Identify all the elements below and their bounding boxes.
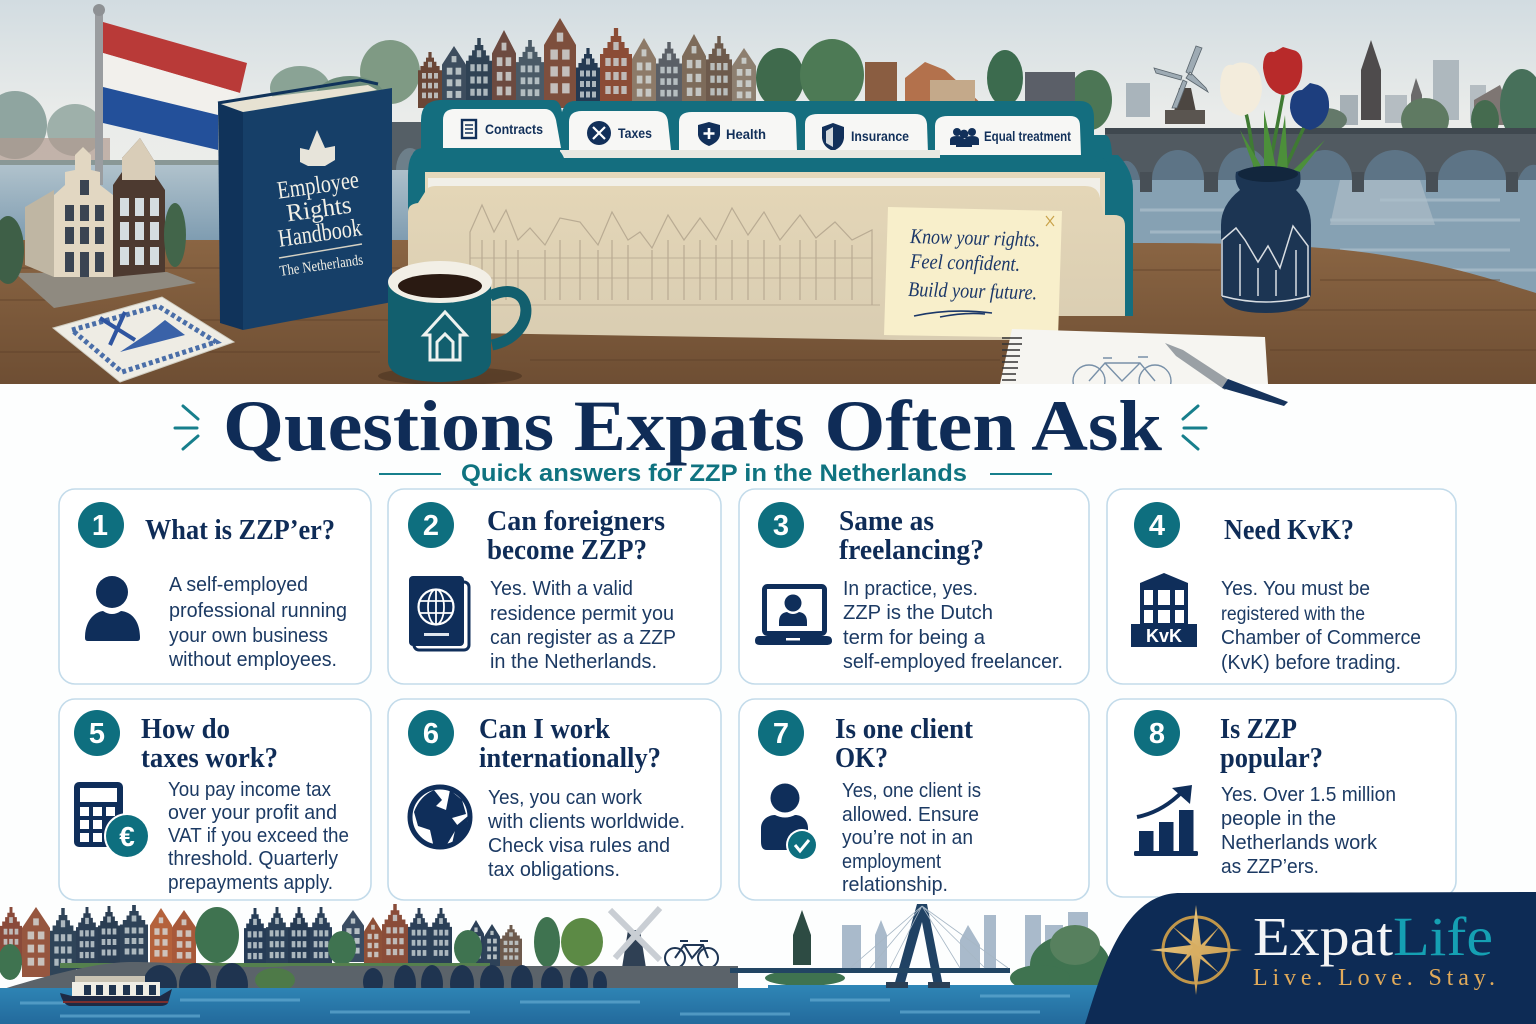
trees behind the folder <box>756 39 1112 130</box>
number badge 2 <box>408 502 454 548</box>
answer 1: professional running <box>169 599 347 622</box>
crest <box>300 130 335 166</box>
skyline towers <box>842 912 1088 975</box>
panel: question 5 <box>59 699 371 900</box>
icon: calculator with euro <box>74 782 150 859</box>
distant trees and town on the left <box>0 40 430 166</box>
answer 8: Netherlands work <box>1221 831 1378 854</box>
number badge 6 <box>408 710 454 756</box>
number badge 8 <box>1134 710 1180 756</box>
heading 8: popular? <box>1220 743 1323 774</box>
answer 6: Check visa rules and <box>488 834 670 857</box>
canal boat <box>60 976 172 1006</box>
icon: laptop with person <box>755 586 832 645</box>
panel: question 6 <box>388 699 721 900</box>
book: Employee Rights Handbook: Employee <box>275 166 360 205</box>
heading 7: OK? <box>835 743 888 774</box>
tab: Taxes: Taxes <box>618 126 652 141</box>
answer 2: can register as a ZZP <box>490 626 676 649</box>
title: Questions Expats Often Ask <box>223 386 1162 466</box>
answer 8 <box>1221 783 1396 878</box>
long stone bridge <box>0 962 738 1007</box>
heading 2: Can foreigners <box>487 506 665 537</box>
answer 5: over your profit and <box>168 801 337 824</box>
brand name: ExpatLife <box>1253 906 1493 967</box>
heading 7 <box>835 714 974 774</box>
answer 6 <box>487 786 685 881</box>
icon: KvK building <box>1131 573 1197 647</box>
tab: Taxes <box>569 111 671 150</box>
answer 4: registered with the <box>1221 604 1365 625</box>
answer 1: A self-employed <box>169 573 308 596</box>
icon: rising bar chart <box>1134 785 1198 856</box>
answer 7: relationship. <box>842 873 948 896</box>
answer 3 <box>843 577 1063 673</box>
faint sketch of houses on the folder <box>470 205 880 305</box>
tagline: Live. Love. Stay. <box>1253 965 1495 991</box>
number badge 4: 4 <box>1149 510 1165 542</box>
answer 7: employment <box>842 850 941 873</box>
windmill <box>610 908 660 968</box>
heading 3: freelancing? <box>839 535 984 566</box>
icon: compass rose <box>1150 905 1242 995</box>
number badge 1: 1 <box>92 510 108 542</box>
answer 7: Yes, one client is <box>842 779 981 802</box>
heading 8 <box>1220 714 1323 774</box>
title ornament left <box>175 406 198 449</box>
answer 5 <box>168 778 349 894</box>
Delft blue tile <box>53 297 234 382</box>
answer 8: Yes. Over 1.5 million <box>1221 783 1396 806</box>
line-drawn houses on the vase <box>1222 226 1310 302</box>
answer 8: people in the <box>1221 807 1336 830</box>
answer 4 <box>1221 577 1421 674</box>
icon: passport <box>409 576 469 650</box>
number badge 1 <box>78 502 124 548</box>
coffee mug <box>378 261 526 385</box>
bicycle <box>665 941 718 968</box>
answer 8: as ZZP’ers. <box>1221 855 1319 878</box>
answer 1: your own business <box>169 624 328 647</box>
right skyline <box>1126 40 1536 142</box>
answer 4: (KvK) before trading. <box>1221 651 1401 674</box>
number badge 4 <box>1134 502 1180 548</box>
panel: question 2 <box>388 489 721 684</box>
icon: person <box>85 576 140 641</box>
house rows <box>0 904 522 978</box>
answer 7 <box>842 779 981 896</box>
title ornament right <box>1183 406 1206 449</box>
book: Employee Rights Handbook: Handbook <box>276 214 364 253</box>
sticky note: Build your future. <box>908 277 1037 304</box>
footer illustration: canal scene <box>0 904 1110 1024</box>
answer 7: allowed. Ensure <box>842 803 979 826</box>
heading 6: internationally? <box>479 743 661 774</box>
answer 1 <box>168 573 347 671</box>
answer 2: in the Netherlands. <box>490 650 657 673</box>
icon: person with check mark <box>761 784 818 861</box>
answer 3: term for being a <box>843 626 986 649</box>
heading 3: Same as <box>839 506 934 537</box>
panel: question 8 <box>1107 699 1456 897</box>
hero illustration: desk with Dutch skyline <box>0 0 1536 397</box>
answer 5: You pay income tax <box>168 778 332 801</box>
panel: question 1 <box>59 489 371 684</box>
file folder with tabs <box>407 100 1133 340</box>
answer 6: Yes, you can work <box>488 786 643 809</box>
arch of the bridge beside the book <box>392 122 426 170</box>
pen <box>1165 343 1288 406</box>
stone bridge <box>1105 128 1536 192</box>
answer 4: Yes. You must be <box>1221 577 1370 600</box>
spiral notebook <box>1000 329 1268 397</box>
answer 2: residence permit you <box>490 602 674 625</box>
heading 2: become ZZP? <box>487 535 647 566</box>
number badge 3: 3 <box>773 510 789 542</box>
book: Employee Rights Handbook: Rights <box>285 192 353 227</box>
house icon on mug <box>424 312 466 360</box>
heading 5 <box>141 714 278 774</box>
number badge 2: 2 <box>423 510 439 542</box>
panel: question 7 <box>739 699 1089 900</box>
heading 6 <box>479 714 661 774</box>
book: Employee Rights Handbook <box>218 80 392 330</box>
tab: Health <box>679 112 797 151</box>
sticky note: Know your rights. <box>909 224 1040 251</box>
heading 5: taxes work? <box>141 743 278 774</box>
number badge 8: 8 <box>1149 718 1165 750</box>
icon: globe <box>410 787 470 848</box>
answer 4: Chamber of Commerce <box>1221 626 1421 649</box>
answer 7: you’re not in an <box>842 826 973 849</box>
sticky note <box>884 207 1062 338</box>
heading 4: Need KvK? <box>1224 515 1354 546</box>
tab: Insurance <box>805 114 928 153</box>
canal houses behind the folder <box>418 18 756 108</box>
panel: question 4 <box>1107 489 1456 684</box>
panel: question 3 <box>739 489 1089 684</box>
number badge 6: 6 <box>423 718 439 750</box>
answer 3: In practice, yes. <box>843 577 978 600</box>
heading 3 <box>839 506 984 566</box>
heading 7: Is one client <box>835 714 974 745</box>
tab: Insurance: Insurance <box>851 129 909 144</box>
answer 3: self-employed freelancer. <box>843 650 1063 673</box>
tab: Contracts: Contracts <box>485 122 543 137</box>
cable-stayed bridge <box>730 904 1010 988</box>
heading 6: Can I work <box>479 714 610 745</box>
number badge 7 <box>758 710 804 756</box>
answer 6: tax obligations. <box>488 858 620 881</box>
tulips in a vase <box>1220 47 1329 313</box>
tab: Equal treatment: Equal treatment <box>984 129 1071 144</box>
heading 2 <box>487 506 665 566</box>
tab: Contracts <box>443 109 561 148</box>
number badge 3 <box>758 502 804 548</box>
right water <box>1100 170 1536 293</box>
icon: calculator with euro: € <box>119 821 135 852</box>
footer trees <box>0 907 1110 995</box>
subtitle: Quick answers for ZZP in the Netherlands <box>461 460 967 487</box>
answer 2: Yes. With a valid <box>490 577 633 600</box>
heading 5: How do <box>141 714 230 745</box>
windmill <box>1154 46 1208 124</box>
answer 5: threshold. Quarterly <box>168 847 339 870</box>
tab: Equal treatment <box>935 116 1081 155</box>
left water <box>0 165 430 243</box>
answer 6: with clients worldwide. <box>487 810 685 833</box>
desk <box>0 240 1536 384</box>
sticky note: Feel confident. <box>909 249 1020 276</box>
footer water <box>0 985 1100 1024</box>
heading 1: What is ZZP’er? <box>145 515 335 546</box>
book: Employee Rights Handbook: The Netherlands <box>279 252 364 280</box>
answer 3: ZZP is the Dutch <box>843 601 993 624</box>
answer 5: prepayments apply. <box>168 871 333 894</box>
logo panel <box>1085 892 1536 1024</box>
answer 5: VAT if you exceed the <box>168 824 349 847</box>
number badge 7: 7 <box>773 718 789 750</box>
answer 1: without employees. <box>168 648 337 671</box>
heading 8: Is ZZP <box>1220 714 1297 745</box>
page background below the hero <box>0 384 1536 1024</box>
number badge 5: 5 <box>89 718 105 750</box>
bicycle sketch <box>1073 357 1171 397</box>
Dutch flag <box>93 4 247 185</box>
icon: KvK building: KvK <box>1146 626 1182 646</box>
tab: Health: Health <box>726 127 766 142</box>
number badge 5 <box>74 710 120 756</box>
miniature canal houses <box>0 138 196 308</box>
answer 2 <box>490 577 676 673</box>
